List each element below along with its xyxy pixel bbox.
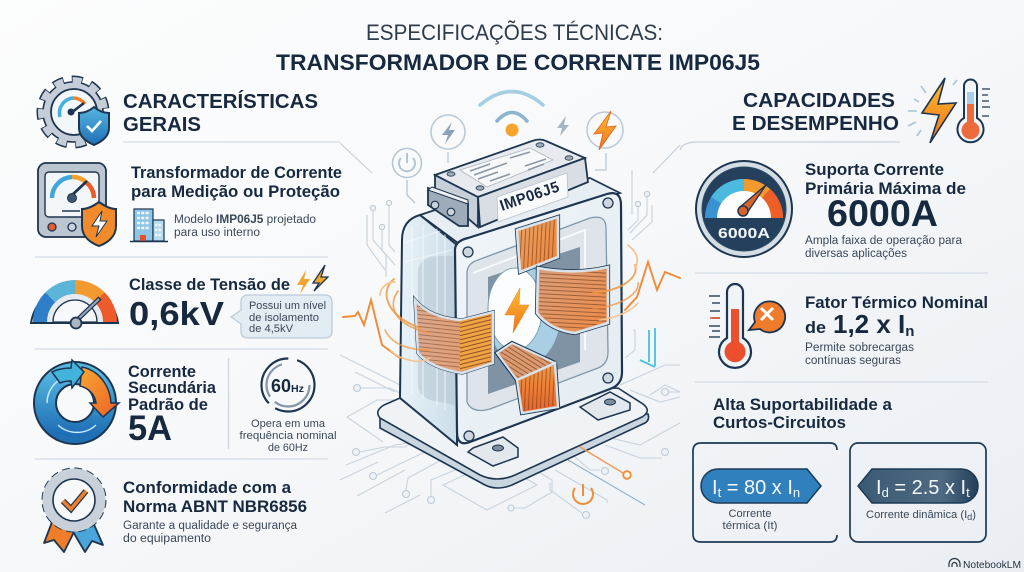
- text: conformidade: Garante a qualidade e segurança: [123, 520, 298, 532]
- heading: alta suportabilidade: [713, 395, 893, 432]
- card: corrente dinâmica: d: [882, 485, 889, 500]
- feet: [468, 392, 630, 466]
- card: corrente dinâmica: d: [967, 512, 972, 522]
- heading: alta suportabilidade: Curtos-Circuitos: [713, 413, 846, 432]
- text: modelo: [174, 214, 316, 239]
- title: [276, 20, 760, 75]
- decorative leader lines: [340, 143, 680, 173]
- text: conformidade: [123, 478, 307, 545]
- text: corrente primária: [805, 160, 966, 260]
- current transformer illustration: [343, 140, 680, 488]
- text: frequência: frequência nominal: [240, 430, 336, 442]
- text: conformidade: Norma ABNT NBR6856: [123, 497, 307, 516]
- icon: bolt and thermometer: [908, 78, 990, 143]
- card: corrente térmica: t: [718, 485, 722, 500]
- text: corrente primária: Primária Máxima de: [805, 179, 966, 198]
- icon: bolt circle: [431, 115, 465, 163]
- text: transformador de corrente: [131, 163, 342, 201]
- circuit traces: [340, 170, 680, 518]
- text: classe de tensão: Classe de Tensão de: [129, 275, 290, 294]
- front face: [455, 193, 622, 443]
- heading: alta suportabilidade: Alta Suportabilidade a: [713, 395, 893, 414]
- text: fator térmico: contínuas seguras: [805, 355, 901, 367]
- text: corrente secundária: [128, 363, 217, 448]
- text: fator térmico: 1,2 x I: [833, 309, 905, 339]
- callout: nível de isolamento: [231, 295, 332, 338]
- card: corrente dinâmica: t: [966, 485, 970, 500]
- text: fator térmico: n: [905, 323, 914, 340]
- icon: orange bolt circle: [587, 111, 623, 170]
- wave: left signal: [343, 279, 430, 361]
- heading: capacidades e desempenho: [732, 90, 899, 135]
- card: corrente térmica: = 80 x I: [721, 477, 793, 499]
- text: fator térmico: de: [805, 318, 826, 337]
- heading: capacidades e desempenho: CAPACIDADES: [743, 90, 895, 112]
- icon: wifi signal: [480, 92, 543, 136]
- icon: 60Hz ring: Hz: [291, 383, 304, 395]
- panel: características gerais: [31, 82, 342, 552]
- icon: cyan bars: [640, 328, 655, 367]
- base plate: [378, 388, 649, 488]
- card: corrente dinâmica: I: [876, 477, 882, 499]
- text: fator térmico: [805, 293, 988, 367]
- callout: nível de isolamento: de 4,5kV: [249, 323, 294, 335]
- text: classe de tensão: [129, 275, 290, 332]
- text: corrente secundária: 5A: [128, 409, 172, 448]
- text: corrente primária: Suporta Corrente: [805, 160, 944, 179]
- copper coils: [415, 217, 608, 413]
- icon: power circle: [392, 148, 422, 203]
- heading: características gerais: [123, 90, 318, 136]
- icon: 6000A gauge: 6000A: [718, 226, 771, 242]
- text: corrente secundária: Secundária: [128, 379, 217, 397]
- icon: center bolt: [505, 288, 529, 333]
- card: corrente dinâmica: Corrente dinâmica (I: [866, 509, 966, 521]
- text: transformador de corrente: para Medição ou Proteção: [131, 182, 340, 201]
- icon: 6000A gauge: [696, 161, 792, 257]
- text: modelo: Modelo IMP06J5 projetado: [174, 214, 316, 226]
- icon: thermometer with alert: [709, 284, 785, 368]
- icon: meter with shield: [38, 163, 116, 246]
- icon: 60Hz ring: [262, 358, 314, 412]
- text: corrente secundária: Corrente: [128, 363, 196, 381]
- icon: building: [130, 209, 168, 242]
- card: corrente térmica: [693, 443, 837, 542]
- icon: voltage gauge: [31, 286, 118, 328]
- terminal box: [428, 140, 588, 227]
- left and top faces: [400, 178, 620, 445]
- icon: certification badge: [44, 472, 103, 552]
- icon: two bolts: [297, 265, 328, 294]
- text: frequência: Opera em uma: [251, 418, 326, 430]
- text: modelo: para uso interno: [174, 227, 260, 239]
- terminal box: IMP06J5: [498, 179, 562, 215]
- icon: orange power: [573, 484, 593, 504]
- wave: right signal: [593, 245, 680, 320]
- text: conformidade: Conformidade com a: [123, 478, 292, 497]
- text: corrente primária: diversas aplicações: [805, 248, 907, 260]
- text: corrente primária: 6000A: [827, 193, 938, 234]
- text: frequência: de 60Hz: [268, 442, 308, 454]
- icon: circular arrows: [45, 360, 119, 433]
- text: transformador de corrente: Transformador de Corrente: [131, 163, 342, 182]
- heading: capacidades e desempenho: E DESEMPENHO: [732, 113, 899, 135]
- card: corrente dinâmica: = 2.5 x I: [889, 477, 966, 499]
- icon: gear with gauge and shield: [43, 82, 109, 145]
- text: corrente secundária: Padrão de: [128, 396, 208, 414]
- callout: nível de isolamento: Possui um nível: [249, 300, 326, 312]
- icon: 60Hz ring: 60: [271, 376, 291, 396]
- title: ESPECIFICAÇÕES TÉCNICAS:: [366, 20, 663, 45]
- panel: capacidades e desempenho: [680, 78, 990, 542]
- card: corrente térmica: térmica (It): [722, 520, 778, 532]
- text: frequência: [240, 418, 336, 454]
- text: classe de tensão: 0,6kV: [129, 295, 224, 332]
- magnetic core: [463, 198, 613, 441]
- text: corrente primária: Ampla faixa de operação para: [805, 235, 963, 247]
- card: corrente térmica: n: [793, 485, 800, 500]
- logo: NotebookLM: NotebookLM: [963, 559, 1021, 571]
- title: TRANSFORMADOR DE CORRENTE IMP06J5: [276, 50, 760, 75]
- icon: orange trace: [580, 447, 631, 479]
- heading: características gerais: CARACTERÍSTICAS: [123, 90, 318, 113]
- text: fator térmico: Fator Térmico Nominal: [805, 293, 988, 312]
- callout: nível de isolamento: de isolamento: [249, 312, 319, 324]
- icon: small grey bolt: [557, 116, 569, 136]
- card: corrente térmica: I: [712, 477, 718, 499]
- card: corrente térmica: Corrente: [728, 508, 772, 520]
- heading: características gerais: GERAIS: [123, 114, 201, 136]
- text: conformidade: do equipamento: [123, 533, 211, 545]
- card: corrente dinâmica: ): [972, 509, 976, 521]
- card: corrente dinâmica: [850, 443, 986, 542]
- text: fator térmico: Permite sobrecargas: [805, 342, 914, 354]
